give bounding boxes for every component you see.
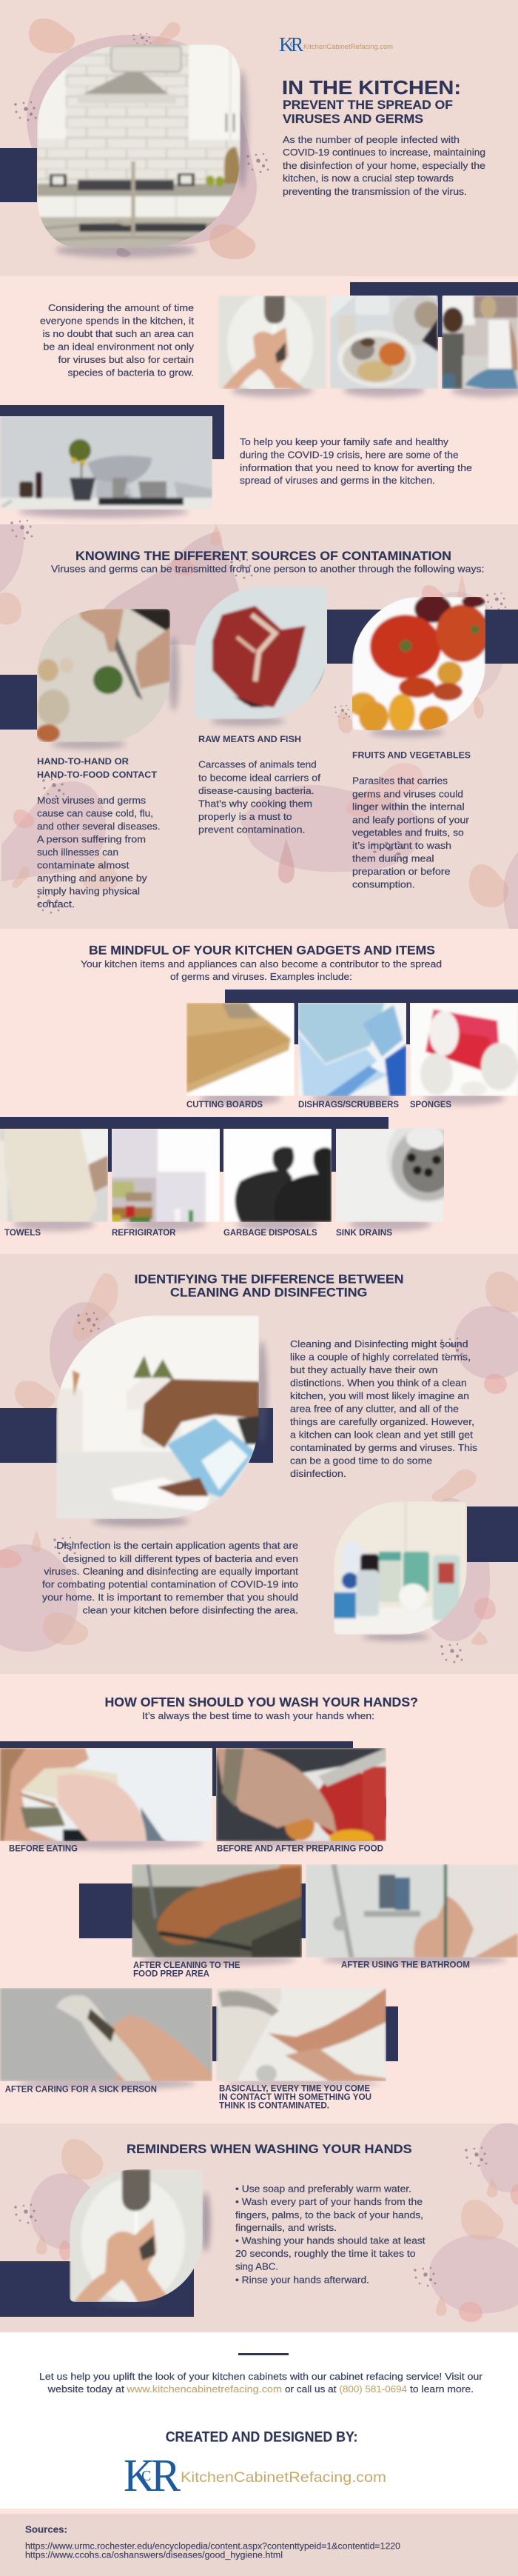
label: row 3 (5, 2083, 371, 2110)
panel: how often to wash hands (0, 1695, 518, 2110)
text: considering: for viruses but also for certain (58, 354, 194, 365)
photo: sponges (410, 1003, 518, 1096)
photo shadow: counter (18, 506, 189, 518)
source urls: https://www.ccohs.ca/oshanswers/diseases/good_hygiene.html (25, 2552, 283, 2560)
photo: food prep cleaning (132, 1864, 302, 1958)
sources label: Sources: (25, 2524, 67, 2535)
column: raw meats: properly is a must to (198, 811, 292, 822)
navy bar right (327, 610, 518, 664)
text: keep family safe (240, 436, 472, 486)
column: fruits and vegetables: it’s important to wash (352, 840, 451, 851)
label: row 1: BEFORE AND AFTER PREPARING FOOD (217, 1843, 383, 1854)
column: fruits and vegetables: germs and viruses could (352, 788, 463, 799)
column: hand contact: HAND-TO-HAND OR (37, 756, 130, 767)
panel: sources (25, 2524, 400, 2560)
text: cleaning: distinctions. When you think of a clean (290, 1377, 467, 1388)
text: disinfection (42, 1540, 298, 1616)
decorative blobs: contamination (0, 520, 518, 929)
heading: created by: CREATED AND DESIGNED BY: (166, 2430, 357, 2446)
label: row 3: AFTER CARING FOR A SICK PERSON (5, 2084, 157, 2095)
photo: refrigerator (112, 1129, 220, 1222)
photo: cutting board (186, 1003, 295, 1096)
intro text: preventing the transmission of the virus. (283, 186, 467, 197)
heading: cleaning: IDENTIFYING THE DIFFERENCE BETWEEN (135, 1272, 403, 1286)
text: keep family safe: during the COVID-19 crisis, here are some of the (240, 450, 459, 461)
logo: KitchenCabinetRefacing.com large: C (141, 2468, 151, 2484)
photo: raw meat (195, 587, 327, 719)
label: row 1 (9, 1843, 383, 1854)
photo: washing hands close-up (70, 2169, 203, 2303)
column: raw meats: RAW MEATS AND FISH (198, 734, 301, 744)
text: cleaning: but they actually have their own (290, 1364, 438, 1375)
column: hand contact (37, 756, 160, 910)
column: hand contact: contact. (37, 898, 75, 910)
panel: reminders (0, 2123, 518, 2322)
photo: spraying disinfectant (56, 1315, 259, 1519)
panel: why the kitchen (0, 282, 518, 518)
text: reminders list: 20 seconds, roughly the time it takes to (235, 2248, 416, 2259)
text: considering: species of bacteria to grow. (68, 367, 194, 378)
column: raw meats: That’s why cooking them (198, 798, 312, 809)
text: keep family safe: spread of viruses and germs in the kitchen. (240, 475, 435, 486)
photo shadow (56, 70, 248, 258)
text: considering (40, 302, 194, 378)
photo: washing hands (218, 296, 326, 389)
intro text (283, 134, 485, 197)
text: cleaning: a kitchen can look clean and yet still get (290, 1429, 473, 1440)
logo: KitchenCabinetRefacing.com large: R (151, 2451, 181, 2501)
call to action text: www.kitchencabinetrefacing.com (126, 2383, 282, 2395)
text: disinfection: for combating potential contamination of COVID-19 into (42, 1579, 298, 1590)
label: gadget row 2: SINK DRAINS (336, 1227, 392, 1238)
photo shadows: contamination (52, 637, 444, 749)
decorative blobs: reminders (14, 2123, 518, 2322)
photo: bathroom (306, 1864, 518, 1958)
photo: preparing food (216, 1748, 386, 1841)
logo: KitchenCabinetRefacing.com small: C (290, 41, 295, 48)
photo: towels (0, 1129, 108, 1222)
label: row 1: BEFORE EATING (9, 1843, 78, 1854)
photo: counter with lemon tree (0, 416, 212, 510)
call to action text: or call us at (285, 2383, 337, 2395)
navy frame: counter photo (0, 405, 224, 459)
photo: before eating (0, 1748, 212, 1841)
label: row 2: AFTER USING THE BATHROOM (341, 1960, 470, 1970)
navy bar left (0, 675, 37, 730)
text: reminders list: fingers, palms, to the back of your hands, (235, 2209, 423, 2220)
text: cleaning: contaminated by germs and viruses. This (290, 1442, 477, 1453)
panel: cleaning and disinfecting (0, 1272, 518, 1663)
heading: cleaning: CLEANING AND DISINFECTING (170, 1286, 367, 1300)
photo shadows: cleaning (92, 1341, 429, 1641)
column: hand contact: anything and anyone by (37, 872, 147, 884)
title (282, 76, 461, 126)
column: hand contact: A person suffering from (37, 833, 146, 844)
call to action text: website today at (47, 2383, 124, 2395)
column: fruits and vegetables: FRUITS AND VEGETABLES (352, 750, 471, 761)
column: raw meats: Carcasses of animals tend (198, 759, 317, 770)
label: gadget row 2: TOWELS (4, 1227, 41, 1238)
panel: call to action (39, 2353, 483, 2501)
navy accent bar (0, 148, 37, 202)
label: gadget row 1: SPONGES (410, 1099, 451, 1110)
label: gadget row 2: GARBAGE DISPOSALS (223, 1227, 317, 1238)
logo: KitchenCabinetRefacing.com small: R (291, 33, 303, 56)
source urls: https://www.urmc.rochester.edu/encyclopedia/content.aspx?contenttypeid=1&contentid=1220 (25, 2542, 400, 2551)
column: raw meats (198, 734, 320, 835)
text: keep family safe: To help you keep your family safe and healthy (240, 436, 448, 447)
title: PREVENT THE SPREAD OF (283, 98, 453, 112)
photo: sink drain (336, 1129, 444, 1222)
column: hand contact: such illnesses can (37, 847, 118, 858)
text: cleaning: things are carefully organized. However, (290, 1416, 474, 1427)
label: row 3: IN CONTACT WITH SOMETHING YOU (219, 2092, 371, 2102)
intro text: As the number of people infected with (283, 134, 460, 145)
column: fruits and vegetables (352, 750, 471, 890)
intro text: COVID-19 continues to increase, maintaining (283, 147, 485, 158)
navy bar: gadgets row 1 (225, 990, 518, 1044)
text: considering: is no doubt that such an area can (43, 328, 194, 339)
text: reminders list (235, 2183, 426, 2285)
logo: KitchenCabinetRefacing.com small: K (279, 33, 295, 56)
text: considering: Considering the amount of time (48, 302, 194, 313)
text: cleaning: like a couple of highly correlated terms, (290, 1351, 471, 1363)
text: disinfection: your home. It is important to remember that you should (42, 1592, 298, 1603)
navy gap stub (437, 296, 443, 337)
heading: cleaning (135, 1272, 403, 1300)
text: disinfection: clean your kitchen before disinfecting the area. (83, 1604, 298, 1616)
label: row 3: THINK IS CONTAMINATED. (219, 2100, 329, 2110)
heading: reminders: REMINDERS WHEN WASHING YOUR HANDS (127, 2142, 412, 2156)
photo: dishrags and scrubbers (298, 1003, 406, 1096)
navy bar right (467, 1506, 518, 1562)
column: fruits and vegetables: consumption. (352, 878, 415, 890)
label: row 2: FOOD PREP AREA (133, 1969, 209, 1979)
column: raw meats: to become ideal carriers of (198, 772, 320, 783)
text: considering: everyone spends in the kitchen, it (40, 316, 194, 327)
text: considering: be an ideal environment not only (43, 341, 194, 353)
column: hand contact: and other several diseases. (37, 821, 160, 832)
photo: disinfecting products (334, 1501, 467, 1635)
text: reminders list: • Washing your hands should take at least (235, 2235, 426, 2246)
photo: garbage bags (223, 1129, 332, 1222)
text: keep family safe: information that you need to know for averting the (240, 462, 472, 473)
column: hand contact: HAND-TO-FOOD CONTACT (37, 770, 158, 780)
logo: KitchenCabinetRefacing.com large (124, 2451, 386, 2501)
column: fruits and vegetables: preparation or before (352, 866, 450, 877)
text: disinfection: designed to kill different types of bacteria and even (62, 1553, 298, 1564)
heading: wash hands: HOW OFTEN SHOULD YOU WASH YOUR HANDS? (105, 1695, 418, 1709)
label: gadget row 2 (4, 1227, 392, 1238)
title: IN THE KITCHEN: (282, 76, 461, 99)
text: cleaning: can be a good time to do some (290, 1455, 432, 1466)
text: cleaning: Cleaning and Disinfecting might sound (290, 1338, 468, 1349)
column: fruits and vegetables: vegetables and fruits, so (352, 827, 464, 838)
subheading: gadgets: Your kitchen items and appliances can also become a contributor to the spread (81, 958, 442, 970)
text: reminders list: fingernails, and wrists. (235, 2222, 337, 2233)
call to action text: (800) 581-0694 (339, 2383, 407, 2395)
label: gadget row 1 (186, 1099, 451, 1110)
column: hand contact: Most viruses and germs (37, 795, 146, 806)
column: hand contact: contaminate almost (37, 859, 130, 870)
photo: contact with contaminated things (216, 1988, 386, 2081)
photo: fruits and vegetables (349, 595, 489, 733)
column: fruits and vegetables: Parasites that carries (352, 775, 448, 787)
panel: kitchen gadgets (0, 944, 518, 1238)
text: reminders list: sing ABC. (235, 2261, 278, 2272)
source urls (25, 2542, 400, 2560)
subheading: wash hands: It’s always the best time to wash your hands when: (142, 1710, 374, 1721)
decorative blobs: intro (14, 19, 269, 259)
text: cleaning: kitchen, you will most likely imagine an (290, 1390, 469, 1401)
text: disinfection: viruses. Cleaning and disinfecting are equally important (44, 1566, 298, 1577)
photo: white kitchen (37, 44, 240, 248)
navy bar: gadgets row 2 (0, 1117, 388, 1172)
column: raw meats: prevent contamination. (198, 824, 305, 835)
text: cleaning: disinfection. (290, 1468, 346, 1479)
title: VIRUSES AND GERMS (283, 112, 423, 126)
column: hand contact: cause can cause cold, flu, (37, 807, 153, 818)
navy block (0, 2261, 194, 2317)
subheading: gadgets (81, 958, 442, 982)
logo: KitchenCabinetRefacing.com small (279, 33, 393, 56)
photo: couple cooking (442, 296, 518, 389)
subheading: contamination: Viruses and germs can be transmitted from one person to another through the following ways: (51, 564, 484, 575)
label: row 2 (133, 1960, 470, 1979)
column: raw meats: disease-causing bacteria. (198, 785, 314, 796)
photo: caring for sick person (0, 1988, 212, 2081)
text: cleaning: area free of any clutter, and all of the (290, 1404, 459, 1415)
navy bar behind top photos (350, 282, 518, 296)
label: row 2: AFTER CLEANING TO THE (133, 1960, 240, 1970)
call to action text: Let us help you uplift the look of your kitchen cabinets with our cabinet refacing service! Visit our (39, 2371, 483, 2382)
logo: KitchenCabinetRefacing.com large: K (124, 2451, 155, 2501)
column: fruits and vegetables: and leafy portions of your (352, 814, 470, 825)
photo shadows: reminders (92, 2192, 210, 2306)
photo: bowls of food (330, 296, 438, 389)
logo: KitchenCabinetRefacing.com small: KitchenCabinetRefacing.com (303, 43, 393, 50)
logo: KitchenCabinetRefacing.com large: KitchenCabinetRefacing.com (181, 2470, 386, 2486)
photo shadows: gadgets (13, 1092, 505, 1231)
column: fruits and vegetables: linger within the internal (352, 801, 465, 812)
heading: contamination: KNOWING THE DIFFERENT SOURCES OF CONTAMINATION (75, 549, 451, 563)
text: cleaning (290, 1338, 477, 1479)
subheading: gadgets: of germs and viruses. Examples include: (170, 971, 352, 982)
text: reminders list: • Rinse your hands afterward. (235, 2274, 369, 2285)
call to action text (39, 2371, 483, 2395)
photo: chopping food (36, 609, 170, 742)
navy bars: wash hands (0, 1741, 398, 2061)
text: reminders list: • Use soap and preferably warm water. (235, 2183, 411, 2195)
photo shadows: wash hands (18, 1838, 507, 2089)
call to action text: to learn more. (410, 2383, 474, 2395)
label: gadget row 2: REFRIGIRATOR (112, 1227, 176, 1238)
navy bar left (0, 1408, 273, 1463)
label: row 3: BASICALLY, EVERY TIME YOU COME (219, 2083, 370, 2093)
photo shadows: top row (232, 384, 518, 397)
text: disinfection: Disinfection is the certain application agents that are (56, 1540, 298, 1551)
label: gadget row 1: DISHRAGS/SCRUBBERS (298, 1099, 399, 1110)
heading: gadgets: BE MINDFUL OF YOUR KITCHEN GADGETS AND ITEMS (89, 944, 435, 958)
column: fruits and vegetables: them during meal (352, 853, 434, 864)
panel: sources of contamination (0, 520, 518, 929)
divider bar (238, 2353, 289, 2355)
decorative blobs: cleaning (0, 1272, 518, 1663)
label: gadget row 1: CUTTING BOARDS (186, 1099, 263, 1110)
text: reminders list: • Wash every part of your hands from the (235, 2196, 423, 2207)
intro text: the disinfection of your home, especially the (283, 160, 485, 171)
intro text: kitchen, is now a crucial step towards (283, 173, 454, 184)
panel: intro (0, 19, 485, 259)
column: hand contact: simply having physical (37, 885, 140, 896)
